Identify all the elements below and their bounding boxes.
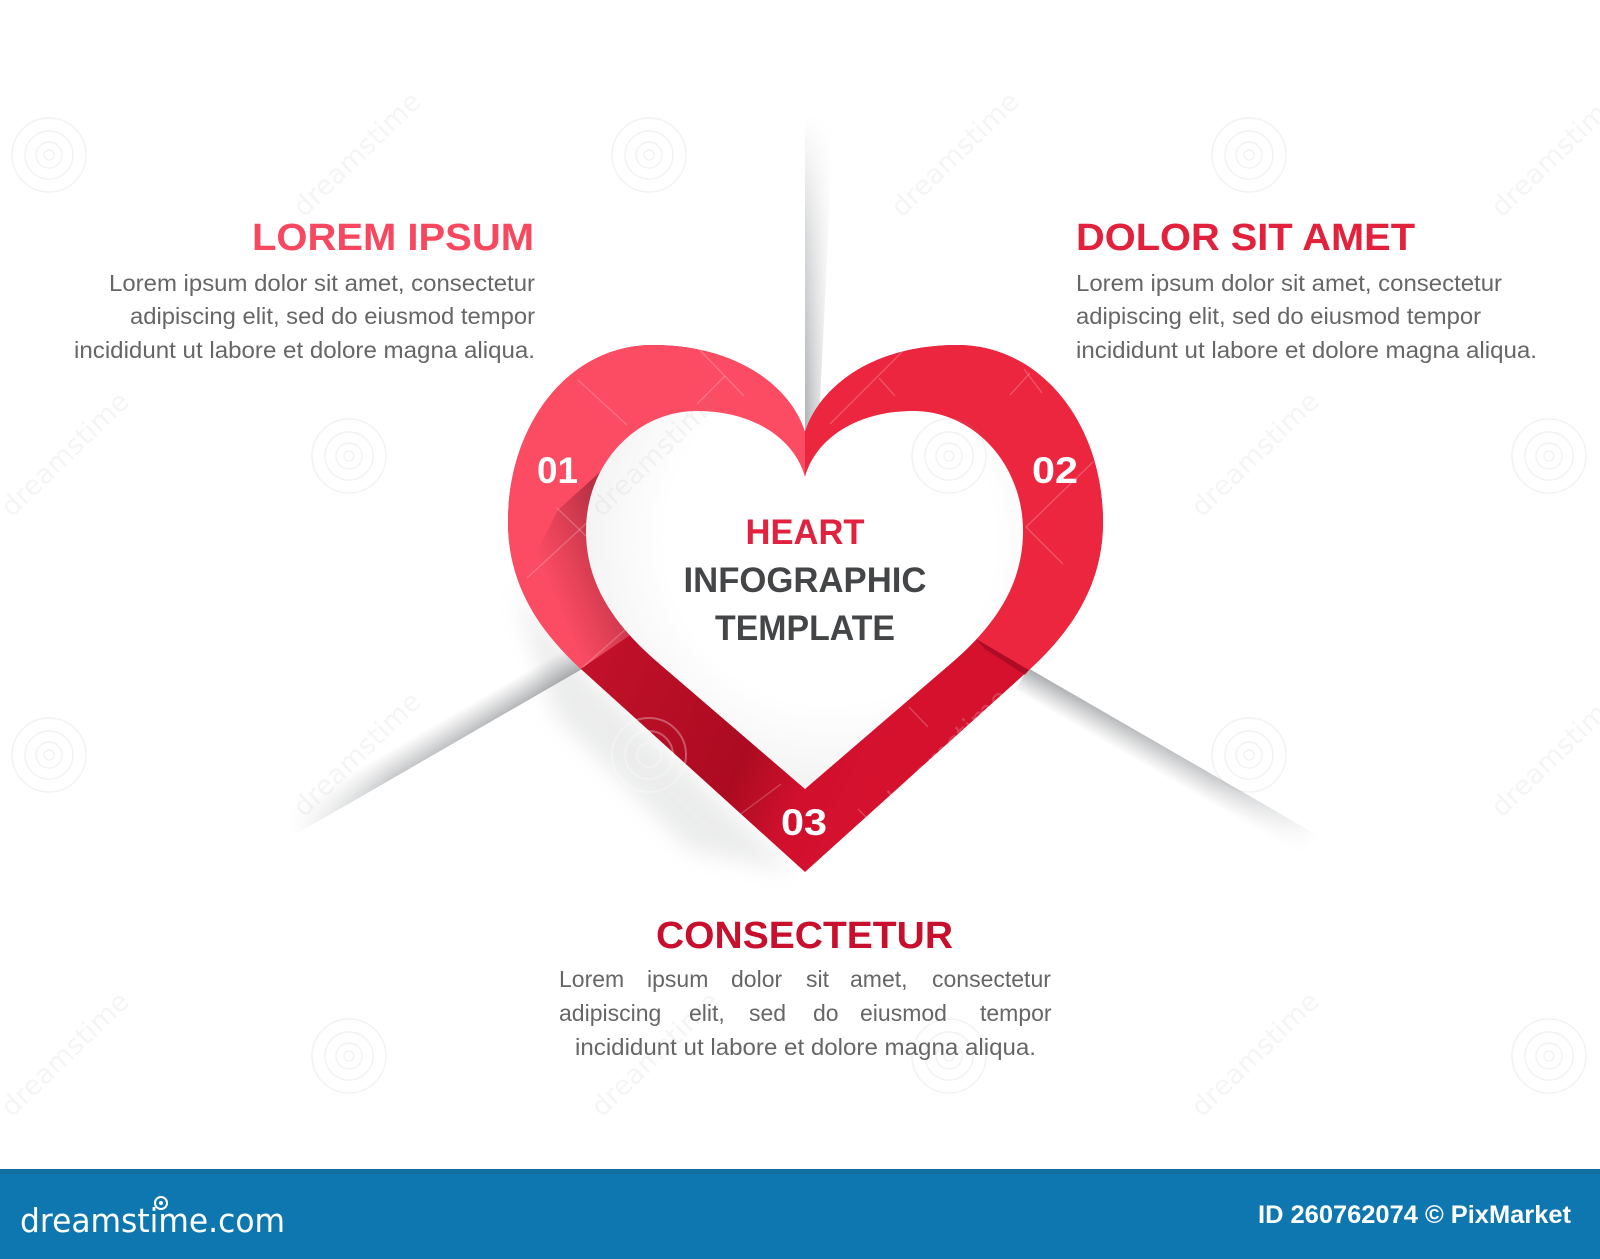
block 03: consectetur bbox=[559, 915, 1052, 1060]
block 03: consectetur: consectetur bbox=[932, 966, 1051, 992]
block 01: lorem ipsum: incididunt ut labore et dolore magna aliqua. bbox=[74, 337, 535, 363]
watermark spiral on band bbox=[612, 718, 686, 792]
block 02: dolor sit amet: Lorem ipsum dolor sit amet, consectetur bbox=[1076, 270, 1502, 296]
fold line: lower right bbox=[1017, 669, 1303, 830]
segment 03: bottom band bbox=[508, 345, 1103, 872]
block 03: consectetur: Lorem bbox=[559, 966, 624, 992]
block 03: consectetur: do bbox=[813, 1000, 839, 1026]
watermark in white heart bbox=[912, 419, 986, 493]
footer logo: dreamstime.com bbox=[20, 1201, 285, 1240]
center title bbox=[684, 513, 926, 648]
number 02: 02 bbox=[1032, 450, 1078, 491]
block 03: consectetur: elit, bbox=[689, 1000, 725, 1026]
block 02: dolor sit amet: adipiscing elit, sed do eiusmod tempor bbox=[1076, 303, 1481, 329]
block 03: consectetur: dolor bbox=[731, 966, 782, 992]
center title: INFOGRAPHIC bbox=[684, 561, 926, 600]
stock watermark pattern: dreamstime bbox=[287, 686, 428, 823]
block 03: consectetur: sit bbox=[806, 966, 830, 992]
block 02: dolor sit amet: incididunt ut labore et dolore magna aliqua. bbox=[1076, 337, 1537, 363]
stock watermark pattern: dreamstime bbox=[1185, 386, 1326, 523]
block 03: consectetur: incididunt ut labore et dolore magna aliqua. bbox=[575, 1034, 1036, 1060]
fold shadow between segments 02 and 03 bbox=[975, 638, 1029, 675]
stock watermark pattern: dreamstime bbox=[287, 86, 428, 223]
fold line: lower left bbox=[308, 653, 582, 826]
block 03: consectetur: amet, bbox=[850, 966, 908, 992]
block 03: consectetur: ipsum bbox=[647, 966, 708, 992]
number 03: 03 bbox=[781, 802, 827, 843]
segment 02: right band bbox=[805, 345, 1103, 670]
footer bar bbox=[0, 1169, 1600, 1259]
block 03: consectetur: sed bbox=[749, 1000, 786, 1026]
block 01: lorem ipsum: LOREM IPSUM bbox=[252, 217, 534, 259]
stock watermark pattern: dreamstime bbox=[885, 86, 1026, 223]
footer image id: ID 260762074 © PixMarket bbox=[1258, 1201, 1572, 1229]
segment 01: left band bbox=[508, 345, 805, 669]
block 03: consectetur: adipiscing bbox=[559, 1000, 661, 1026]
block 02: dolor sit amet bbox=[1076, 217, 1537, 363]
block 02: dolor sit amet: DOLOR SIT AMET bbox=[1076, 217, 1415, 259]
fold line: top vertical bbox=[805, 141, 827, 432]
center title: HEART bbox=[746, 513, 864, 552]
block 03: consectetur: CONSECTETUR bbox=[656, 915, 953, 957]
number 01: 01 bbox=[537, 450, 578, 491]
soft drop shadow of heart, lower left bbox=[515, 590, 795, 872]
block 01: lorem ipsum bbox=[74, 217, 535, 363]
block 03: consectetur: eiusmod bbox=[860, 1000, 947, 1026]
faint watermark lines across bands bbox=[527, 347, 1093, 824]
watermark text in white heart: dreamstime bbox=[585, 386, 726, 523]
central white heart bbox=[586, 411, 1023, 789]
block 01: lorem ipsum: adipiscing elit, sed do eiusmod tempor bbox=[130, 303, 535, 329]
stock watermark pattern: dreamstime bbox=[1185, 986, 1326, 1123]
watermark text on band: dreamstime bbox=[875, 683, 1016, 820]
stock watermark pattern: dreamstime bbox=[585, 986, 726, 1123]
block 01: lorem ipsum: Lorem ipsum dolor sit amet, consectetur bbox=[109, 270, 535, 296]
center title: TEMPLATE bbox=[715, 609, 895, 648]
block 03: consectetur: tempor bbox=[980, 1000, 1052, 1026]
heart diagram bbox=[508, 345, 1103, 872]
